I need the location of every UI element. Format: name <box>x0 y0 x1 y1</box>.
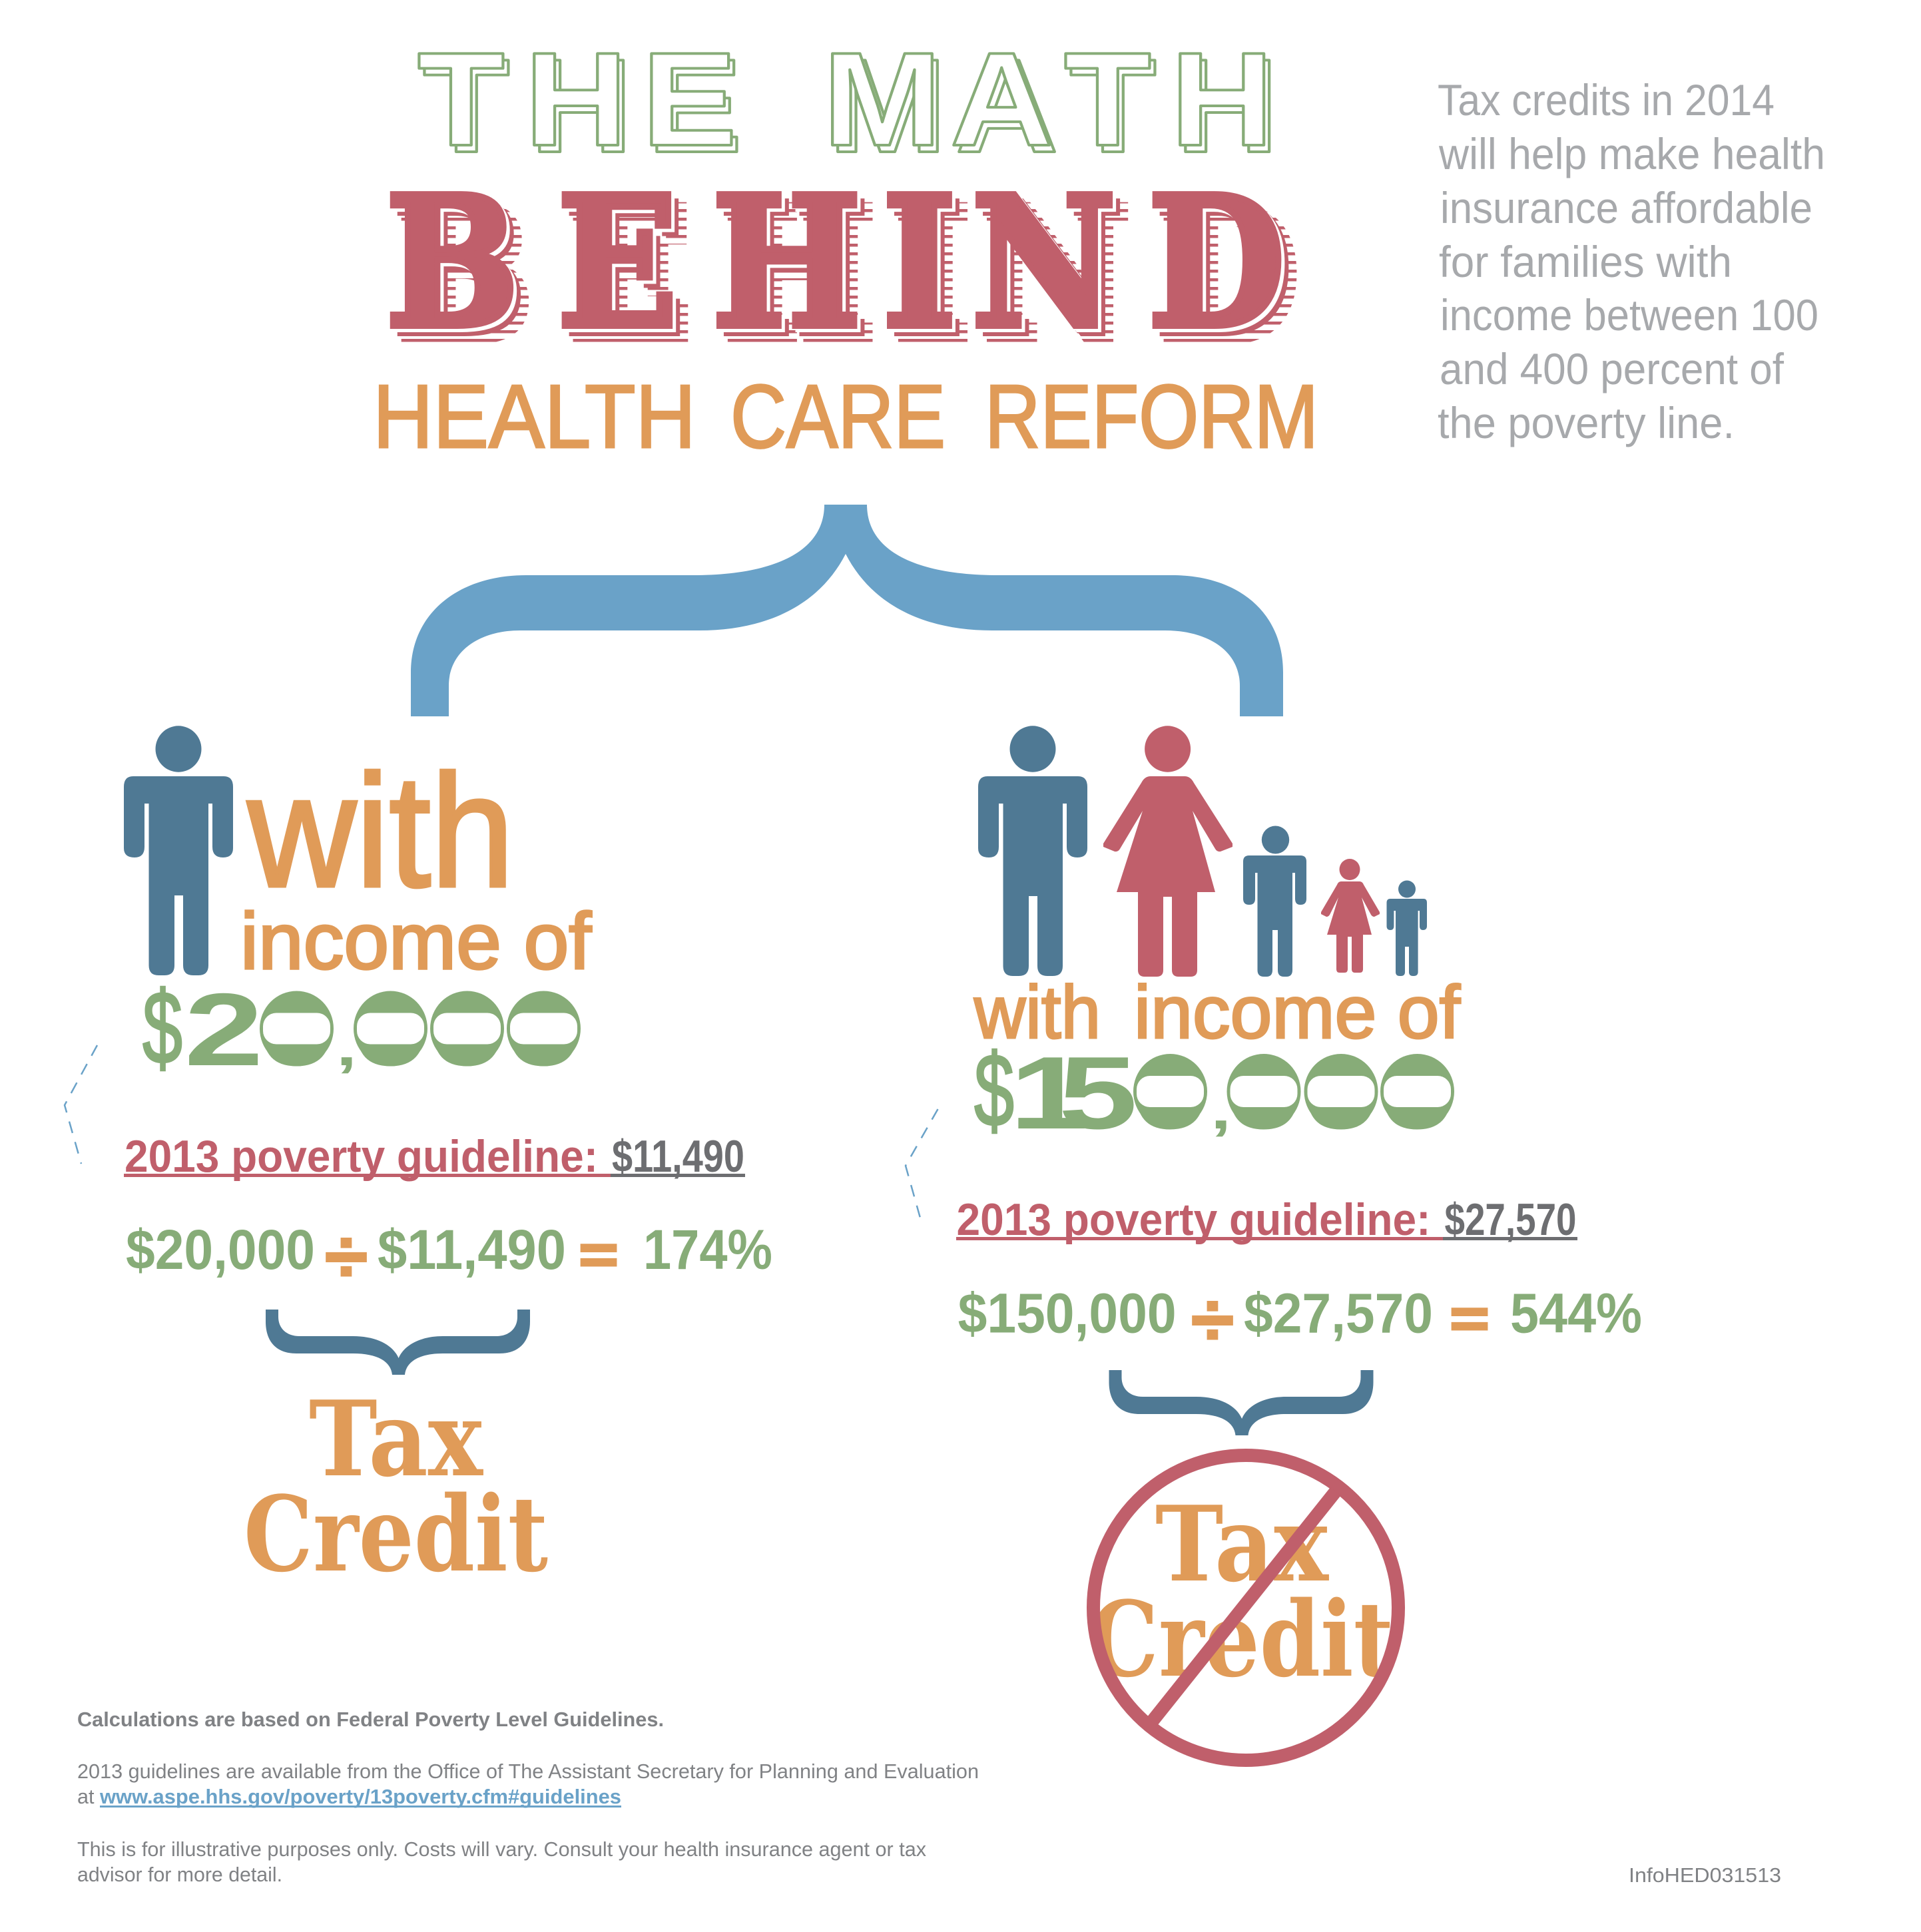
large blue brace <box>411 505 1283 716</box>
formula: 544%: $150,000 <box>958 1282 1177 1345</box>
footnotes: www.aspe.hhs.gov/poverty/13poverty.cfm#guidelines <box>99 1786 621 1808</box>
icon: father <box>978 726 1087 976</box>
result: tax credit: Tax <box>309 1378 484 1500</box>
income amount: $150,000: 150,000 <box>1009 1035 1457 1150</box>
footnotes: 2013 guidelines are available from the Office of The Assistant Secretary for Planning and Evaluation <box>77 1760 979 1783</box>
title line: health care reform: REFORM <box>985 366 1318 467</box>
intro paragraph: Tax credits in 2014 <box>1438 75 1775 124</box>
panel: individual <box>65 726 772 1595</box>
heading: with income of: with <box>973 971 1101 1054</box>
result: tax credit: Credit <box>244 1473 548 1595</box>
intro paragraph: and 400 percent of <box>1440 344 1784 393</box>
small brace <box>1109 1370 1373 1435</box>
formula: 174%: 174% <box>643 1218 772 1281</box>
title line: behind: BEHIND <box>386 156 1285 368</box>
formula: 174% <box>126 1216 772 1298</box>
crossed out text <box>1089 1483 1394 1700</box>
poverty guideline: 2013 poverty guideline: <box>956 1194 1430 1245</box>
income amount: $150,000: $ <box>974 1033 1014 1148</box>
icon: man <box>124 726 233 975</box>
panel: family <box>906 726 1642 1760</box>
income amount: $20,000: $ <box>142 970 182 1085</box>
footnotes: advisor for more detail. <box>77 1863 282 1886</box>
formula: 544% <box>958 1279 1642 1361</box>
intro paragraph: the poverty line. <box>1438 398 1735 447</box>
icon: small boy <box>1386 880 1427 976</box>
poverty guideline: 2013 poverty guideline: <box>125 1131 598 1182</box>
icon: prohibition sign <box>1093 1455 1398 1760</box>
intro paragraph: will help make health <box>1438 129 1825 178</box>
formula: 174%: = <box>579 1225 618 1284</box>
poverty guideline: $11,490 <box>612 1131 744 1182</box>
formula: 174%: ÷ <box>325 1216 368 1298</box>
title line: the math: THE MATH <box>417 25 1274 173</box>
intro paragraph: income between 100 <box>1440 290 1818 340</box>
income amount: $20,000: 20,000 <box>184 972 583 1087</box>
heading: with income of: income of <box>240 897 592 986</box>
icon: girl <box>1321 859 1380 973</box>
title <box>373 25 1318 467</box>
intro paragraph <box>1438 75 1825 447</box>
crossed out text: Tax <box>1155 1483 1330 1605</box>
heading: with income of: income of <box>1134 971 1461 1054</box>
dashed connector <box>906 1109 938 1225</box>
small brace <box>266 1310 530 1375</box>
heading: with income of: with <box>247 742 514 920</box>
heading: with income of <box>973 971 1461 1054</box>
icon: boy <box>1243 826 1306 977</box>
title line: health care reform: CARE <box>730 366 946 467</box>
footnotes: Calculations are based on Federal Poverty Level Guidelines. <box>77 1708 664 1731</box>
crossed out text: Credit <box>1089 1578 1394 1700</box>
formula: 174%: $11,490 <box>378 1218 566 1281</box>
dashed connector <box>65 1045 97 1164</box>
poverty guideline: $27,570 <box>1445 1194 1577 1245</box>
heading: with income of <box>240 742 592 986</box>
icon: family of five <box>978 726 1427 977</box>
icon: mother <box>1103 726 1233 977</box>
title line: health care reform: HEALTH <box>373 366 696 467</box>
footnotes: at <box>77 1786 95 1808</box>
formula: 544%: 544% <box>1510 1282 1642 1345</box>
formula: 544%: ÷ <box>1191 1279 1234 1361</box>
intro paragraph: for families with <box>1439 237 1732 286</box>
formula: 174%: $20,000 <box>126 1218 315 1281</box>
document code: InfoHED031513 <box>1629 1864 1781 1887</box>
intro paragraph: insurance affordable <box>1440 183 1812 232</box>
footnotes: This is for illustrative purposes only. Costs will vary. Consult your health insurance agent or tax <box>77 1838 926 1861</box>
formula: 544%: $27,570 <box>1244 1282 1433 1345</box>
result: tax credit <box>244 1378 548 1595</box>
formula: 544%: = <box>1450 1289 1489 1348</box>
result: no tax credit <box>1089 1455 1398 1760</box>
title line: health care reform <box>373 366 1318 467</box>
footnotes <box>77 1708 979 1886</box>
